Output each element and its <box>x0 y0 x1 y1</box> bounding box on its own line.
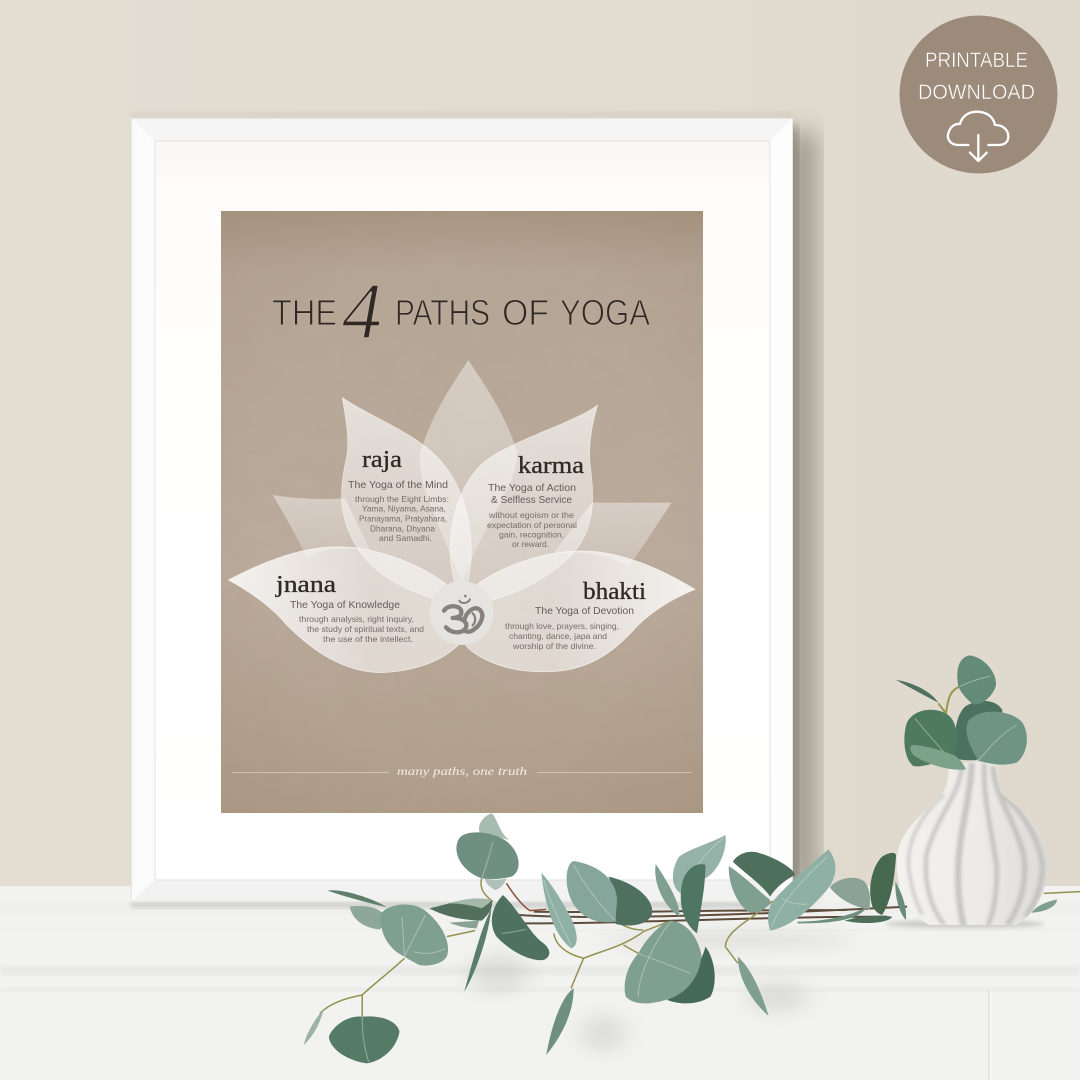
vase with eucalyptus <box>885 655 1048 928</box>
bhakti text <box>505 579 646 651</box>
garland shadows on mantel <box>469 933 852 1053</box>
lotus flower <box>228 360 695 673</box>
raja text: Pranayama, Pratyahara, <box>359 514 447 524</box>
lotus petals <box>228 360 695 673</box>
garland leaves <box>304 813 1057 1063</box>
karma text <box>487 453 584 549</box>
jnana text: the study of spiritual texts, and <box>307 624 424 634</box>
jnana text: the use of the intellect. <box>323 634 413 644</box>
om circle <box>430 581 494 645</box>
bhakti text: bhakti <box>583 579 646 605</box>
icon: ribbed ceramic vase <box>897 762 1048 925</box>
bhakti text: chanting, dance, japa and <box>509 631 607 641</box>
jnana text: The Yoga of Knowledge <box>290 599 400 611</box>
eucalyptus garland <box>304 813 1080 1063</box>
karma text: The Yoga of Action <box>488 482 576 494</box>
raja text <box>348 447 449 543</box>
badge: printable download <box>900 16 1058 174</box>
raja text: Yama, Niyama, Asana, <box>362 504 446 514</box>
icon: om symbol <box>444 595 482 632</box>
karma text: karma <box>518 453 584 479</box>
karma text: gain, recognition, <box>499 530 564 540</box>
title: 4 <box>342 268 382 356</box>
bhakti text: The Yoga of Devotion <box>535 605 634 617</box>
mantel shelf <box>0 886 1080 1080</box>
raja text: Dharana, Dhyana <box>370 524 435 534</box>
vase shadow <box>885 920 1045 928</box>
picture frame <box>131 118 793 902</box>
raja text: through the Eight Limbs: <box>355 494 449 504</box>
raja text: The Yoga of the Mind <box>348 479 448 491</box>
title: PATHS <box>395 292 490 333</box>
jnana text: jnana <box>275 572 336 598</box>
bhakti text: through love, prayers, singing, <box>505 621 619 631</box>
vase leaves <box>896 655 1027 770</box>
title: OF <box>502 292 549 333</box>
karma text: or reward. <box>512 539 549 549</box>
raja text: raja <box>362 447 402 473</box>
karma text: expectation of personal <box>487 520 577 530</box>
title: YOGA <box>560 292 650 333</box>
vase stems <box>938 687 983 761</box>
poster tagline: many paths, one truth <box>397 764 527 778</box>
garland twigs and stems <box>320 878 1080 1017</box>
raja text: and Samadhi. <box>379 533 432 543</box>
frame shadow on wall <box>131 112 816 908</box>
karma text: without egoism or the <box>488 510 574 520</box>
poster: background <box>221 211 703 813</box>
badge: printable download: PRINTABLE <box>925 49 1028 72</box>
title: THE <box>272 292 337 333</box>
bhakti text: worship of the divine. <box>512 641 596 651</box>
badge: printable download: DOWNLOAD <box>918 81 1035 104</box>
jnana text <box>275 572 424 644</box>
jnana text: through analysis, right inquiry, <box>299 614 414 624</box>
karma text: & Selfless Service <box>491 494 572 506</box>
title <box>272 268 650 356</box>
icon: cloud download <box>948 112 1008 161</box>
